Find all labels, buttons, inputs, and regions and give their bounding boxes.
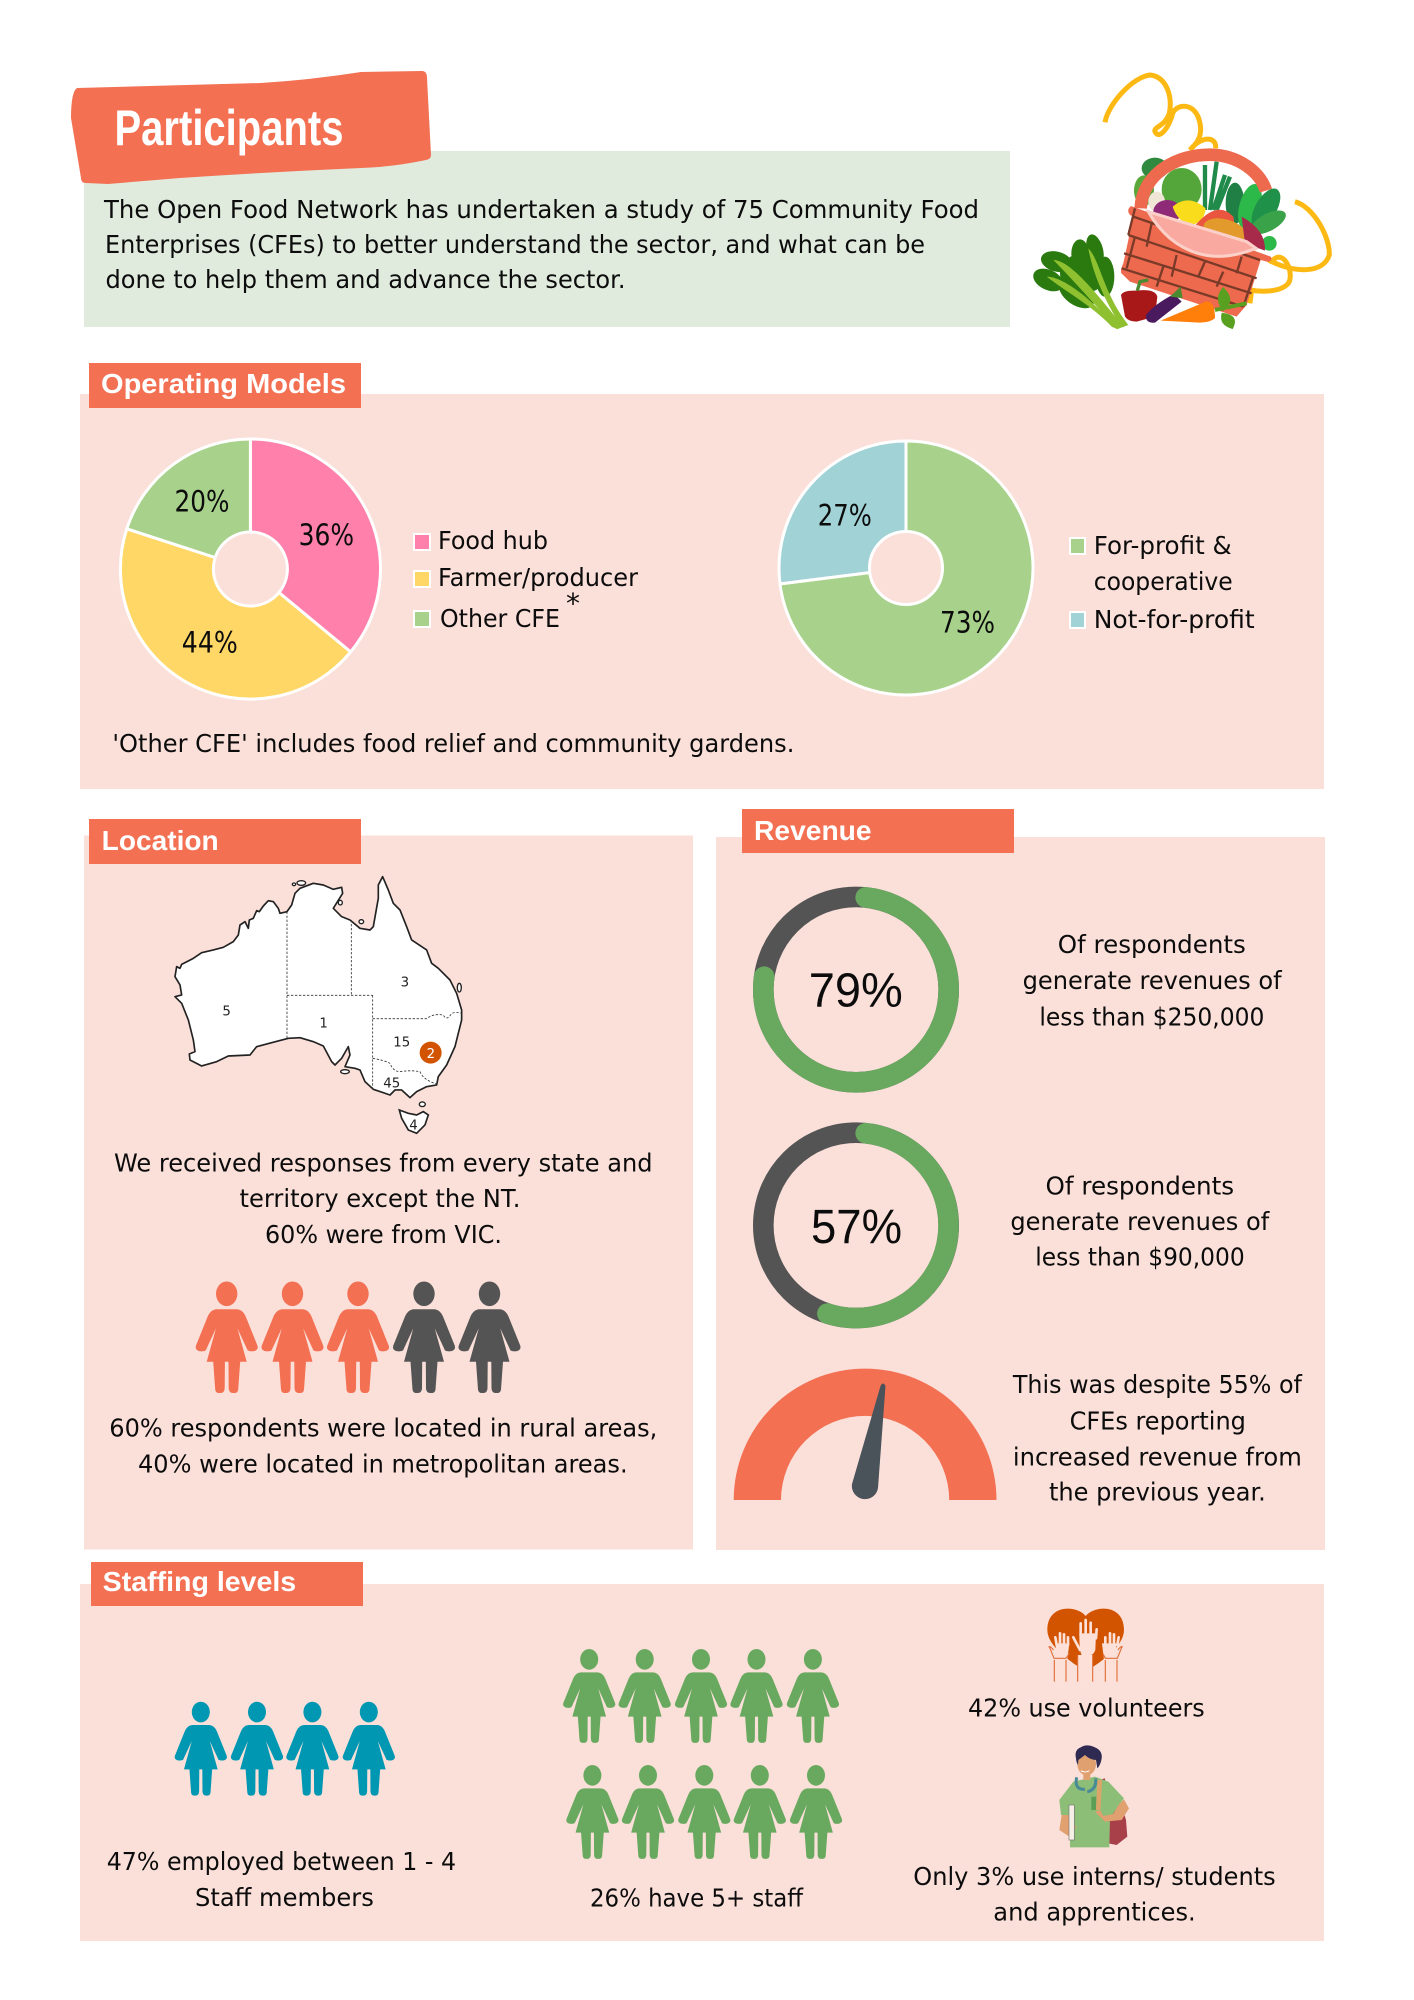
revenue text 1 [1023,930,1283,1031]
illustration: student with backpack [1059,1745,1129,1847]
panel: intro [84,151,1010,327]
pie chart: CFE type: 20% [174,485,230,519]
donut: 57% [763,1133,949,1318]
pie chart: CFE type: 44% [182,626,238,660]
revenue text 1: Of respondents [1058,930,1246,959]
revenue text 2: Of respondents [1046,1172,1234,1200]
map of Australia: 3 [401,976,409,991]
title ribbon: Participants [114,100,344,156]
intro text [103,195,979,294]
1-4 staff text: Staff members [195,1883,374,1912]
revenue text 3: CFEs reporting [1070,1406,1246,1435]
interns text: and apprentices. [993,1898,1196,1927]
rural metro text: 60% respondents were located in rural areas, [109,1414,657,1443]
map of Australia: 2 [427,1047,435,1062]
pie chart: business type: 73% [940,606,995,640]
legend: business type: For-profit & [1094,531,1232,560]
1-4 staff text: 47% employed between 1 - 4 [107,1847,456,1876]
heading: location [89,819,361,864]
map of Australia: 4 [409,1118,418,1133]
interns text [913,1862,1276,1927]
icon row: 1-4 staff [175,1702,395,1796]
revenue text 3 [1012,1370,1303,1506]
revenue text 3: the previous year. [1049,1478,1266,1506]
panel: revenue [716,809,1325,1550]
1-4 staff text [107,1847,456,1912]
panel: staffing levels [80,1562,1324,1941]
map of Australia: 15 [393,1036,410,1051]
rural metro text [109,1414,657,1478]
heading: staffing levels [91,1562,363,1606]
map of Australia: 45 [383,1076,400,1091]
heading: location: Location [102,825,219,856]
panel: location [84,819,693,1550]
revenue text 2 [1010,1172,1270,1272]
pie chart: business type [779,441,1033,695]
location text: We received responses from every state and [114,1148,652,1177]
pie chart: business type: 27% [818,499,872,533]
revenue text 3: increased revenue from [1013,1443,1302,1472]
title ribbon [71,71,431,184]
legend: CFE type: * [566,587,580,620]
legend: business type [1070,531,1255,634]
icon row: rural vs metropolitan people [196,1282,521,1393]
5+ staff text: 26% have 5+ staff [590,1884,804,1913]
pie chart: CFE type: 36% [299,518,354,552]
pie chart: CFE type [120,439,380,699]
legend: business type: Not-for-profit [1094,605,1255,634]
heading: operating models [89,363,361,408]
icon: volunteer hands heart [1047,1609,1124,1682]
revenue text 3: This was despite 55% of [1012,1370,1303,1399]
location text: 60% were from VIC. [265,1220,502,1249]
heading: revenue [742,809,1014,853]
map of Australia: 5 [222,1004,231,1019]
location text [114,1148,652,1249]
footnote: 'Other CFE' includes food relief and community gardens. [112,729,794,758]
revenue text 2: generate revenues of [1010,1207,1270,1236]
intro text: The Open Food Network has undertaken a study of 75 Community Food [103,195,979,224]
legend: CFE type: Other CFE [440,604,560,633]
intro text: Enterprises (CFEs) to better understand the sector, and what can be [105,230,925,259]
heading: staffing levels: Staffing levels [103,1566,296,1597]
heading: operating models: Operating Models [101,368,346,399]
volunteers text: 42% use volunteers [968,1694,1205,1723]
rural metro text: 40% were located in metropolitan areas. [138,1449,628,1478]
heading: revenue: Revenue [754,815,872,846]
legend: CFE type: Farmer/producer [438,563,639,592]
revenue text 1: less than $250,000 [1039,1002,1264,1031]
map of Australia [175,877,462,1133]
icon grid: 5+ staff [563,1649,842,1859]
gauge [734,1369,996,1500]
legend: CFE type: Food hub [438,526,548,555]
intro text: done to help them and advance the sector. [106,265,626,294]
interns text: Only 3% use interns/ students [913,1862,1276,1891]
donut: 57%: 57% [811,1201,902,1254]
donut: 79% [763,897,949,1082]
illustration: vegetable basket [1030,75,1329,329]
legend: CFE type [414,526,639,633]
panel: operating models [80,363,1324,789]
donut: 79%: 79% [809,964,903,1018]
revenue text 1: generate revenues of [1023,966,1283,995]
map of Australia: 1 [319,1016,328,1031]
revenue text 2: less than $90,000 [1035,1243,1245,1272]
location text: territory except the NT. [240,1184,520,1213]
legend: business type: cooperative [1094,567,1233,596]
